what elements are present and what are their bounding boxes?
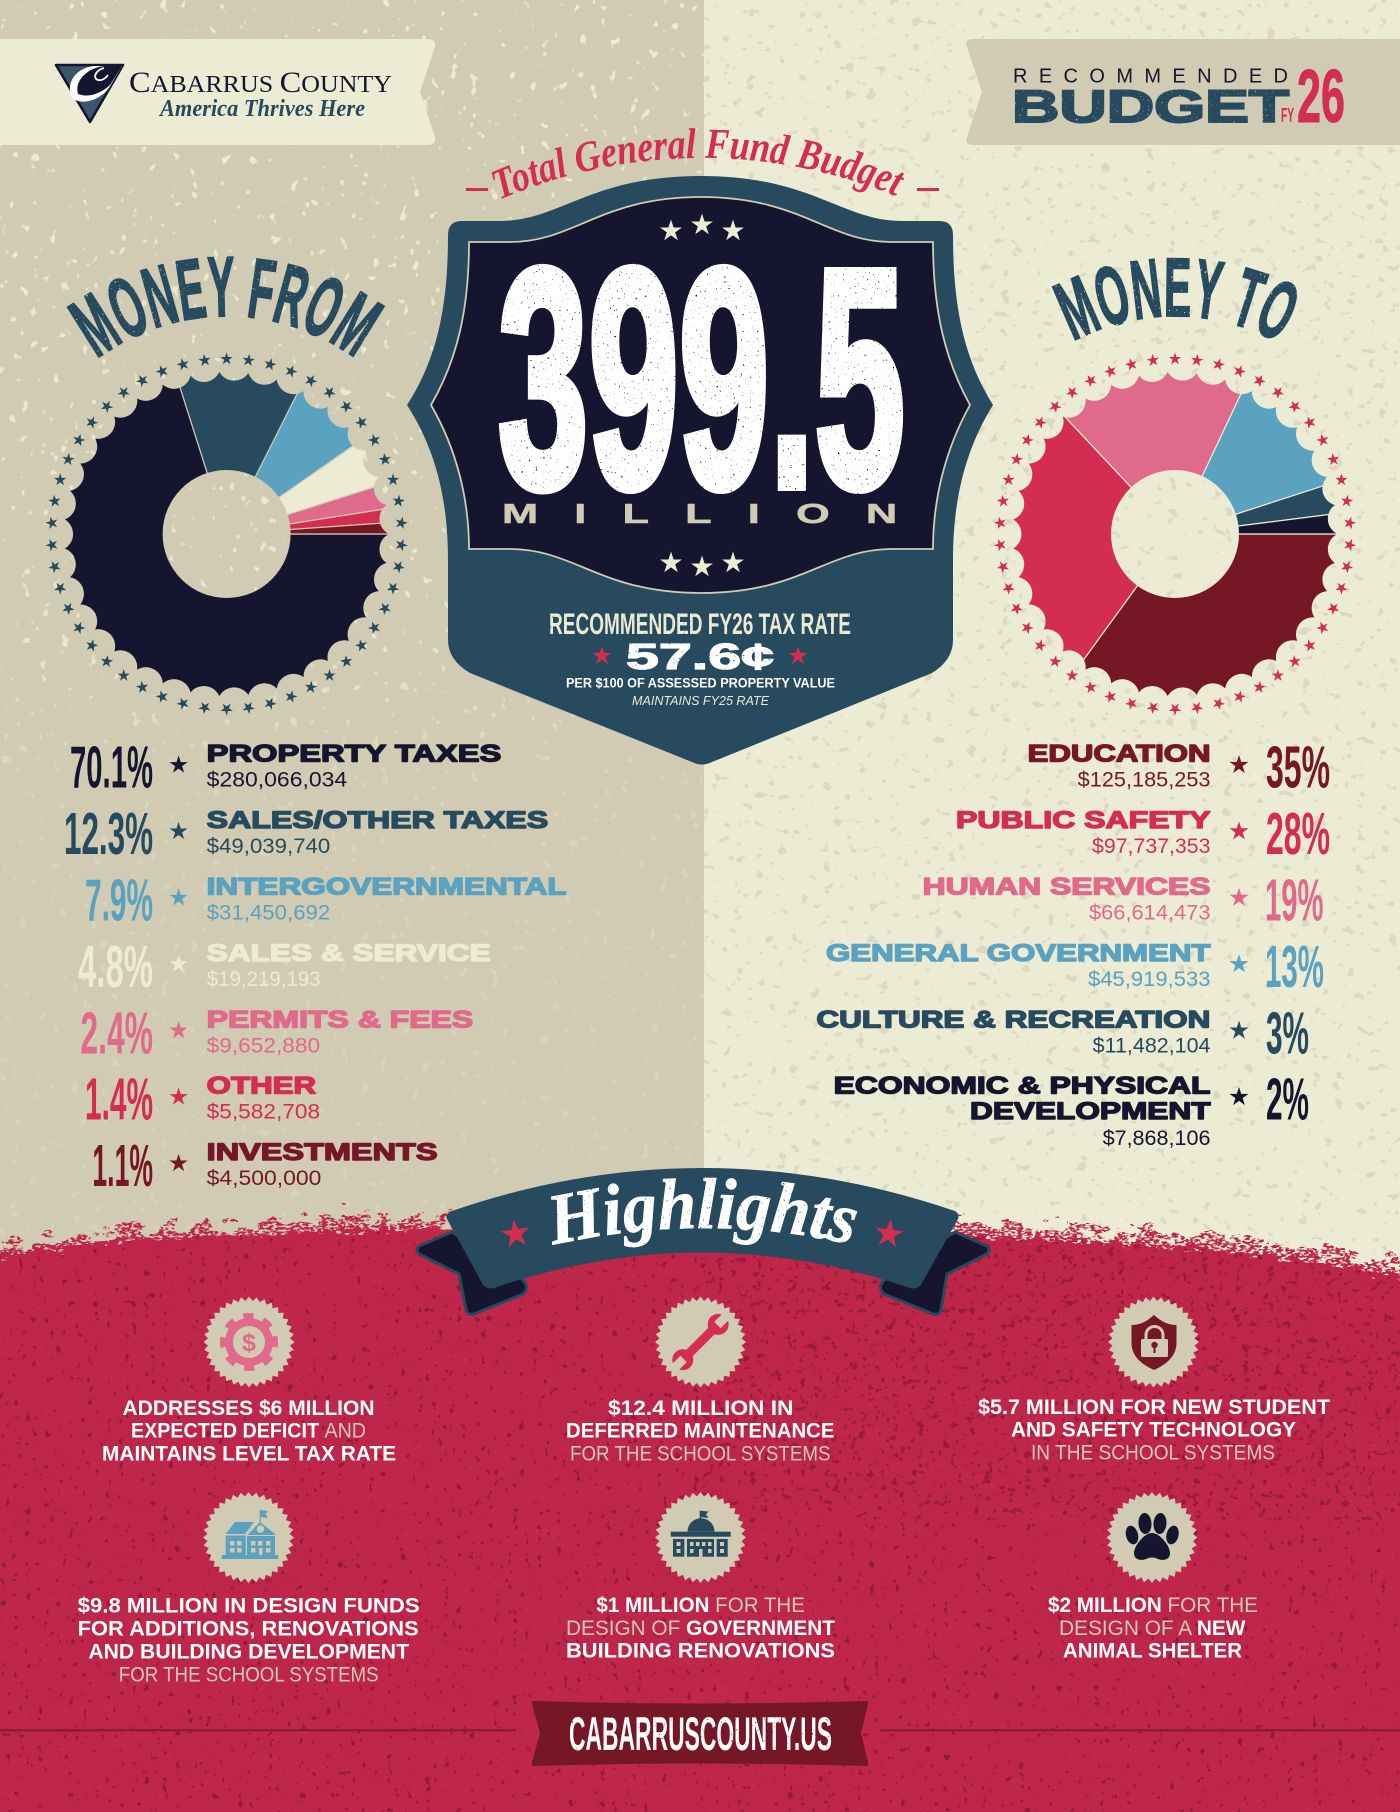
row: sales and other taxes: $49,039,740	[207, 835, 330, 858]
icon: Cabarrus C triangle	[56, 65, 123, 122]
row: other: $5,582,708	[207, 1101, 320, 1124]
ribbon tail right	[880, 1232, 989, 1314]
highlight text: IN THE SCHOOL SYSTEMS	[1031, 1442, 1275, 1464]
row: permits and fees: $9,652,880	[207, 1034, 320, 1057]
banner: Cabarrus County logo	[0, 39, 435, 145]
banner: Recommended Budget FY26: RECOMMENDED	[1013, 66, 1288, 88]
logo tagline: America Thrives Here	[158, 96, 365, 122]
row: general government	[826, 934, 1324, 1000]
highlight text: $12.4 MILLION IN	[608, 1397, 793, 1420]
icon: paw print	[1094, 1482, 1210, 1593]
highlight text: FOR THE SCHOOL SYSTEMS	[119, 1664, 379, 1686]
footer: website ribbon	[0, 1701, 1400, 1766]
row: culture and recreation: 3%	[1266, 1000, 1309, 1066]
row: public safety	[956, 801, 1330, 867]
row: education: EDUCATION	[1028, 741, 1210, 768]
row: other: 1.4%	[85, 1067, 153, 1133]
highlight text: FOR THE SCHOOL SYSTEMS	[570, 1442, 830, 1466]
star ring	[20, 330, 434, 738]
highlight text: DESIGN OF A NEW	[1059, 1617, 1246, 1640]
star ring	[968, 330, 1382, 738]
heading: Highlights: Highlights	[551, 1178, 858, 1248]
highlight text	[566, 1397, 834, 1466]
red torn-paper highlights background	[0, 1216, 1400, 1812]
highlight text: EXPECTED DEFICIT AND	[131, 1420, 366, 1442]
row: investments: INVESTMENTS	[207, 1139, 438, 1166]
highlight text: DESIGN OF GOVERNMENT	[566, 1617, 835, 1640]
row: property taxes: 70.1%	[70, 735, 153, 801]
row: sales and other taxes: SALES/OTHER TAXES	[207, 807, 548, 834]
banner: Recommended Budget FY26: BUDGET	[1012, 81, 1289, 132]
donut slices	[1013, 372, 1336, 696]
row: culture and recreation: CULTURE & RECREATION	[816, 1006, 1210, 1033]
row: economic and physical development: DEVELOPMENT	[970, 1098, 1211, 1125]
icon: three stars bottom	[660, 552, 744, 576]
heading: Money From: MONEY FROM	[66, 256, 386, 358]
tax rate value	[592, 636, 808, 677]
highlight text: $9.8 MILLION IN DESIGN FUNDS	[78, 1594, 420, 1618]
icon: school building	[190, 1482, 307, 1593]
row: sales and service: 4.8%	[78, 934, 153, 1000]
row: human services	[923, 868, 1324, 934]
heading: Money To: MONEY TO	[1052, 258, 1297, 341]
row: investments	[92, 1133, 438, 1199]
tax rate caption: PER $100 OF ASSESSED PROPERTY VALUE	[566, 676, 835, 690]
icon: three stars top	[660, 214, 744, 240]
row: human services: $66,614,473	[1089, 902, 1210, 924]
row: property taxes: $280,066,034	[207, 769, 348, 792]
highlight text: ADDRESSES $6 MILLION	[122, 1397, 374, 1420]
row: investments: 1.1%	[92, 1133, 153, 1199]
row: intergovernmental: 7.9%	[85, 868, 153, 934]
logo wordmark: CABARRUS COUNTY	[129, 66, 392, 99]
row: intergovernmental: $31,450,692	[207, 902, 330, 924]
footer: website ribbon: CABARRUSCOUNTY.US	[569, 1707, 832, 1760]
row: intergovernmental: INTERGOVERNMENTAL	[207, 874, 567, 900]
row: sales and service: $19,219,193	[207, 968, 321, 991]
chart: money to donut	[994, 352, 1356, 716]
tax rate heading: RECOMMENDED FY26 TAX RATE	[549, 608, 851, 641]
highlight: deficit and tax rate	[102, 1287, 396, 1466]
background: split tan and cream panels	[0, 0, 1400, 1300]
row: economic and physical development: ECONOMIC & PHYSICAL	[834, 1073, 1210, 1100]
icon: capitol building	[642, 1482, 759, 1593]
highlight text	[978, 1396, 1330, 1464]
ribbon tail left	[417, 1232, 526, 1314]
banner: Recommended Budget FY26: 26	[1297, 54, 1345, 138]
list: money to legend	[816, 735, 1330, 1150]
row: human services: HUMAN SERVICES	[923, 874, 1210, 900]
highlight text: AND SAFETY TECHNOLOGY	[1011, 1418, 1296, 1442]
list: money from legend	[64, 735, 567, 1199]
highlight text: BUILDING RENOVATIONS	[566, 1640, 835, 1663]
row: permits and fees: 2.4%	[80, 1000, 153, 1066]
highlight text: $5.7 MILLION FOR NEW STUDENT	[978, 1396, 1330, 1419]
chart: money from donut	[46, 352, 408, 716]
highlight text: FOR ADDITIONS, RENOVATIONS	[78, 1618, 419, 1640]
highlight text: ANIMAL SHELTER	[1063, 1640, 1242, 1663]
row: sales and service: SALES & SERVICE	[207, 940, 491, 967]
row: public safety: $97,737,353	[1092, 835, 1210, 858]
highlight: school design funds	[78, 1482, 420, 1686]
row: other: OTHER	[207, 1073, 316, 1100]
donut slices	[64, 372, 388, 696]
heading: Total General Fund Budget: Total General Fund Budget	[492, 128, 904, 199]
row: intergovernmental	[85, 868, 567, 934]
row: property taxes: PROPERTY TAXES	[207, 741, 501, 768]
highlight text: DEFERRED MAINTENANCE	[566, 1420, 834, 1442]
icon: ribbon star right	[873, 1217, 905, 1248]
highlight text: $2 MILLION FOR THE	[1048, 1594, 1258, 1617]
row: general government: $45,919,533	[1088, 968, 1210, 991]
ribbon: Highlights banner	[415, 1168, 991, 1316]
highlight: government building renovations	[566, 1482, 835, 1663]
row: investments: $4,500,000	[207, 1167, 321, 1190]
highlight: student and safety technology	[978, 1287, 1330, 1464]
row: economic and physical development	[834, 1067, 1309, 1150]
row: culture and recreation	[816, 1000, 1309, 1066]
ribbon body	[447, 1168, 959, 1288]
icon: shield with padlock	[1095, 1287, 1212, 1397]
row: other	[85, 1067, 320, 1133]
list: money to legend: 19%	[1265, 868, 1324, 934]
row: education	[1028, 735, 1330, 801]
row: economic and physical development: $7,868,106	[1103, 1127, 1210, 1150]
million label: MILLION	[502, 498, 897, 529]
banner: Recommended Budget FY26	[966, 39, 1400, 145]
highlight text: AND BUILDING DEVELOPMENT	[88, 1640, 409, 1664]
row: education: 35%	[1266, 735, 1330, 801]
row: public safety: PUBLIC SAFETY	[956, 807, 1210, 834]
highlight text	[78, 1594, 420, 1686]
row: sales and other taxes	[64, 801, 548, 867]
icon: ribbon star left	[499, 1217, 531, 1248]
panel: central budget shield	[407, 176, 993, 764]
row: sales and service	[78, 934, 491, 1000]
banner: Recommended Budget FY26: FY	[1281, 105, 1294, 127]
row: property taxes	[70, 735, 501, 801]
row: economic and physical development: 2%	[1266, 1067, 1309, 1133]
highlight: deferred maintenance	[566, 1287, 834, 1466]
icon: gear with dollar: $	[242, 1329, 256, 1357]
highlight text: MAINTAINS LEVEL TAX RATE	[102, 1442, 396, 1466]
tax rate value: 57.6¢	[626, 636, 774, 677]
icon: gear with dollar	[191, 1287, 307, 1397]
highlight text	[1048, 1594, 1258, 1663]
highlight text	[102, 1397, 396, 1466]
highlight text	[566, 1594, 835, 1663]
highlight: animal shelter	[1048, 1482, 1258, 1663]
row: permits and fees: PERMITS & FEES	[207, 1006, 473, 1033]
highlight text: $1 MILLION FOR THE	[596, 1594, 805, 1617]
icon: wrench	[642, 1287, 759, 1397]
row: education: $125,185,253	[1078, 769, 1210, 792]
row: culture and recreation: $11,482,104	[1093, 1034, 1211, 1057]
headline figure: 399.5	[498, 204, 905, 552]
maintains note: MAINTAINS FY25 RATE	[632, 694, 770, 708]
row: sales and other taxes: 12.3%	[64, 801, 153, 867]
list: money to legend: 13%	[1265, 934, 1324, 1000]
row: permits and fees	[80, 1000, 473, 1066]
row: general government: GENERAL GOVERNMENT	[826, 940, 1211, 967]
row: public safety: 28%	[1266, 801, 1330, 867]
